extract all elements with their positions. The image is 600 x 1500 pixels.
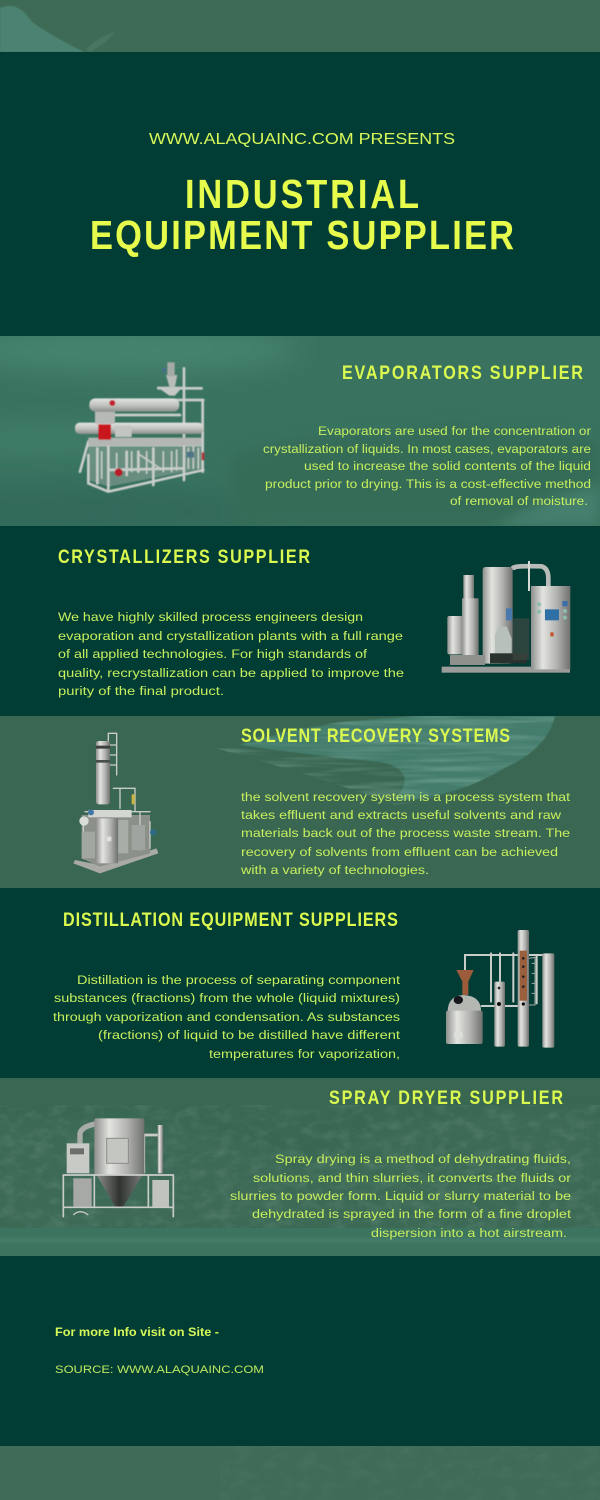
body text: spray dryer: slurries to powder form. Liquid or slurry material to be [230,1189,571,1203]
icon: spray dryer machine [63,1118,173,1217]
body text: crystallizers: quality, recrystallization can be applied to improve the [58,666,404,680]
panel: distillation [53,909,554,1061]
body text: solvent recovery: the solvent recovery system is a process system that [241,790,571,804]
body text: evaporators: product prior to drying. This is a cost-effective method [265,477,591,491]
body text: crystallizers: We have highly skilled process engineers design [58,610,363,624]
panel background: spray dryer [0,1078,600,1256]
source line: SOURCE: WWW.ALAQUAINC.COM [55,1364,264,1376]
body text: spray dryer: Spray drying is a method of dehydrating fluids, [275,1152,571,1166]
body text: spray dryer: dehydrated is sprayed in the form of a fine droplet [252,1207,572,1221]
icon: crystallizer machine [442,561,570,673]
body text: solvent recovery: recovery of solvents from effluent can be achieved [241,845,558,859]
body text: solvent recovery: materials back out of the process waste stream. The [241,826,570,840]
heading: spray dryer: SPRAY DRYER SUPPLIER [329,1087,563,1108]
body text: evaporators: of removal of moisture. [450,494,588,508]
body text: solvent recovery [240,790,571,877]
body text: crystallizers: purity of the final product. [58,684,224,698]
body text: spray dryer: solutions, and thin slurries, it converts the fluids or [253,1171,571,1185]
body text: spray dryer [230,1152,572,1240]
body text: solvent recovery: takes effluent and extracts useful solvents and raw [241,808,561,822]
top texture band [0,0,600,52]
body text: solvent recovery: with a variety of technologies. [240,863,429,877]
panel: solvent recovery [0,716,600,888]
body text: crystallizers: evaporation and crystallization plants with a full range [58,629,403,643]
body text: distillation: through vaporization and condensation. As substances [53,1010,400,1024]
bottom texture band [0,1446,600,1500]
icon: solvent recovery machine [73,733,158,873]
icon: distillation still [446,930,554,1048]
footer [55,1327,264,1376]
icon: evaporator machine [75,362,204,492]
body text: spray dryer: dispersion into a hot airstream. [371,1226,567,1240]
title: EQUIPMENT SUPPLIER [90,213,514,259]
panel background: evaporators [0,328,600,538]
body text: distillation: temperatures for vaporization, [209,1047,400,1061]
body text: distillation: substances (fractions) from the whole (liquid mixtures) [54,991,400,1005]
body text: distillation: (fractions) of liquid to be distilled have different [98,1028,401,1042]
heading: distillation: DISTILLATION EQUIPMENT SUPPLIERS [63,909,398,930]
panel: crystallizers [58,546,570,698]
heading: crystallizers: CRYSTALLIZERS SUPPLIER [58,546,310,567]
body text: evaporators: crystallization of liquids. In most cases, evaporators are [263,442,591,456]
title: INDUSTRIAL [185,172,419,218]
body text: distillation [53,973,401,1061]
body text: crystallizers: of all applied technologies. For high standards of [58,647,368,661]
body text: distillation: Distillation is the process of separating component [77,973,401,987]
panel: evaporators [0,328,600,538]
body text: evaporators: used to increase the solid contents of the liquid [304,459,591,473]
header [90,131,514,259]
body text: crystallizers [58,610,404,698]
body text: evaporators [263,424,591,508]
title [90,172,514,259]
panel: spray dryer [0,1078,600,1256]
presenter line: WWW.ALAQUAINC.COM PRESENTS [149,131,455,148]
heading: evaporators: EVAPORATORS SUPPLIER [342,362,583,383]
footer call to action: For more Info visit on Site - [55,1327,219,1339]
heading: solvent recovery: SOLVENT RECOVERY SYSTEMS [241,725,510,746]
body text: evaporators: Evaporators are used for the concentration or [318,424,591,438]
panel background: solvent recovery [0,716,600,888]
